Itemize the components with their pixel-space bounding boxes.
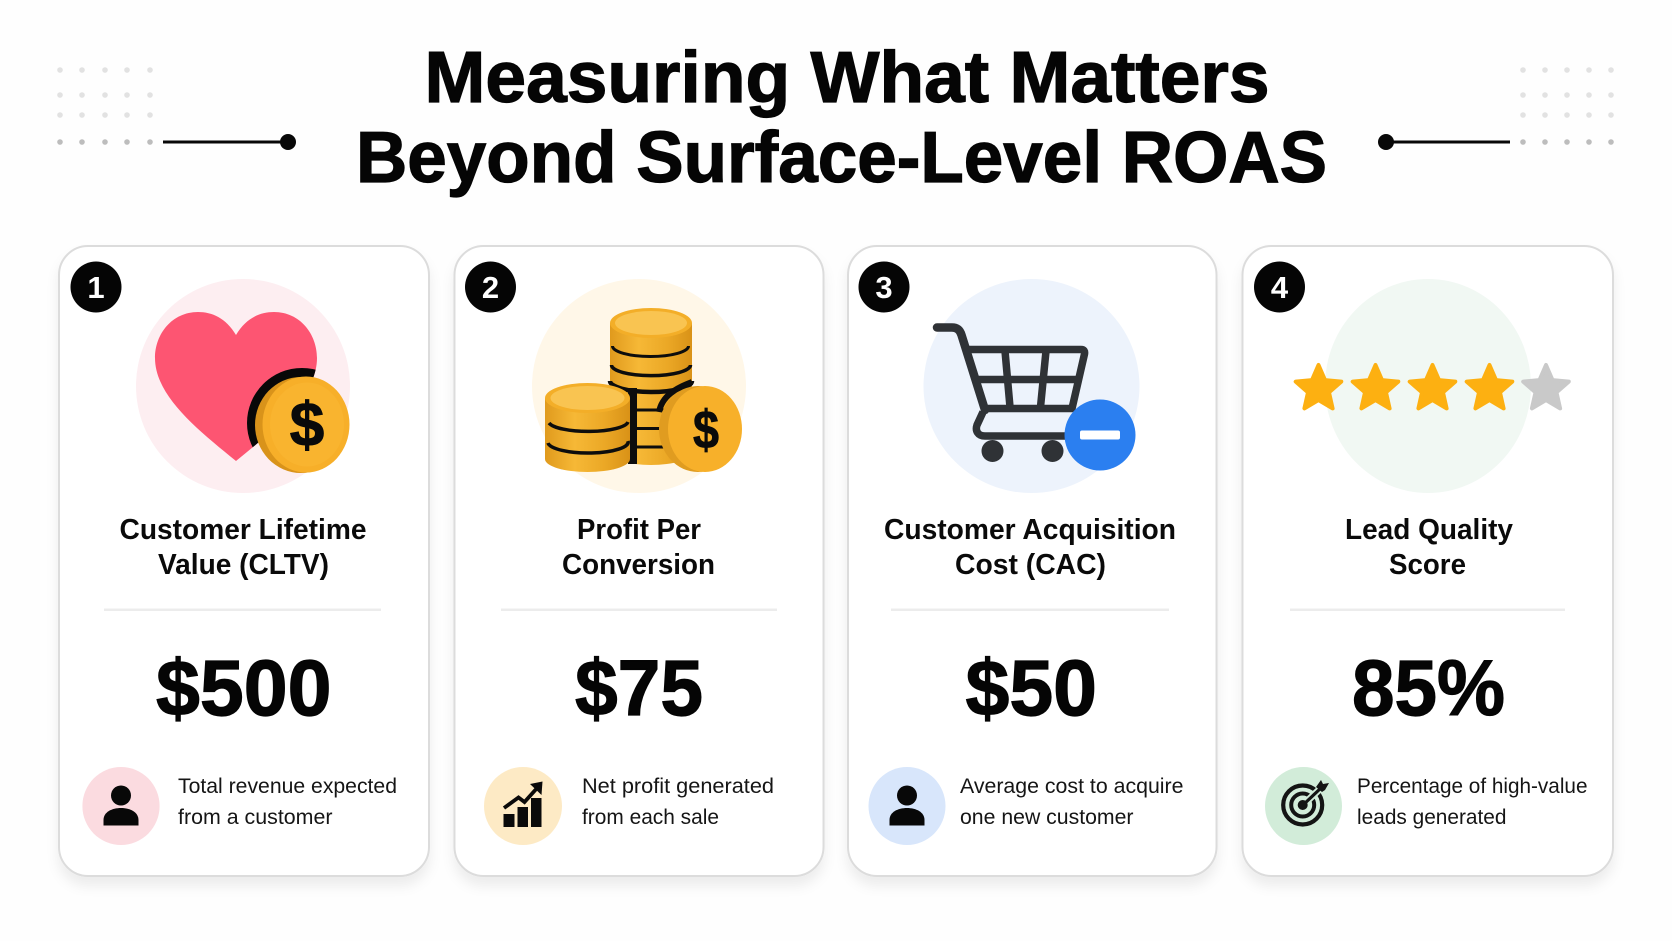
description: Percentage of high-value bbox=[1357, 774, 1588, 798]
card heading: Conversion bbox=[562, 549, 715, 581]
icon: person pink bbox=[82, 767, 160, 845]
icon: heart with coin bbox=[136, 279, 357, 493]
icon: star rating bbox=[1296, 279, 1569, 493]
number badge 3: 3 bbox=[875, 270, 893, 305]
number badge 3 bbox=[858, 262, 910, 312]
card heading: Score bbox=[1389, 549, 1466, 581]
number badge 1 bbox=[70, 262, 122, 312]
panel: profit per conversion bbox=[454, 246, 824, 876]
description: from each sale bbox=[582, 805, 719, 829]
description bbox=[1357, 774, 1588, 829]
number badge 4 bbox=[1254, 262, 1305, 312]
icon: person blue bbox=[868, 767, 946, 845]
description: leads generated bbox=[1357, 805, 1506, 829]
icon: target bbox=[1265, 767, 1342, 845]
description: Average cost to acquire bbox=[960, 774, 1184, 798]
card heading bbox=[120, 514, 366, 581]
card heading: Value (CLTV) bbox=[158, 549, 329, 581]
card heading: Customer Acquisition bbox=[884, 514, 1176, 546]
card heading: Cost (CAC) bbox=[955, 549, 1106, 581]
card heading: Lead Quality bbox=[1345, 514, 1513, 546]
title: Beyond Surface-Level ROAS bbox=[356, 117, 1327, 198]
number badge 1: 1 bbox=[87, 270, 105, 305]
card heading bbox=[562, 514, 715, 581]
title: Measuring What Matters bbox=[424, 37, 1270, 118]
icon: shopping cart with minus bbox=[924, 279, 1140, 493]
card heading bbox=[1345, 514, 1513, 581]
card heading: Profit Per bbox=[577, 514, 701, 546]
description: one new customer bbox=[960, 805, 1134, 829]
panel: customer lifetime value bbox=[59, 246, 429, 876]
panel: lead quality score bbox=[1242, 246, 1613, 876]
description bbox=[960, 774, 1184, 829]
icon: growth chart bbox=[484, 767, 562, 845]
panel: customer acquisition cost bbox=[848, 246, 1216, 876]
icon: coin stacks bbox=[532, 279, 746, 493]
number badge 2: 2 bbox=[482, 270, 499, 305]
card heading: Customer Lifetime bbox=[120, 514, 366, 546]
title bbox=[356, 37, 1327, 198]
metric value: $75 bbox=[575, 643, 703, 732]
icon: heart with coin: $ bbox=[290, 391, 324, 460]
metric value: $500 bbox=[156, 643, 332, 732]
description bbox=[178, 774, 397, 829]
decoration: left dots and connector bbox=[57, 67, 296, 150]
decoration: right dots and connector bbox=[1378, 67, 1614, 150]
description: Net profit generated bbox=[582, 774, 774, 798]
number badge 4: 4 bbox=[1271, 270, 1289, 305]
number badge 2 bbox=[465, 262, 516, 312]
description bbox=[582, 774, 774, 829]
metric value: $50 bbox=[966, 643, 1097, 732]
description: from a customer bbox=[178, 805, 332, 829]
icon: coin stacks: $ bbox=[693, 400, 719, 460]
card heading bbox=[884, 514, 1176, 581]
description: Total revenue expected bbox=[178, 774, 397, 798]
metric value: 85% bbox=[1352, 643, 1505, 732]
